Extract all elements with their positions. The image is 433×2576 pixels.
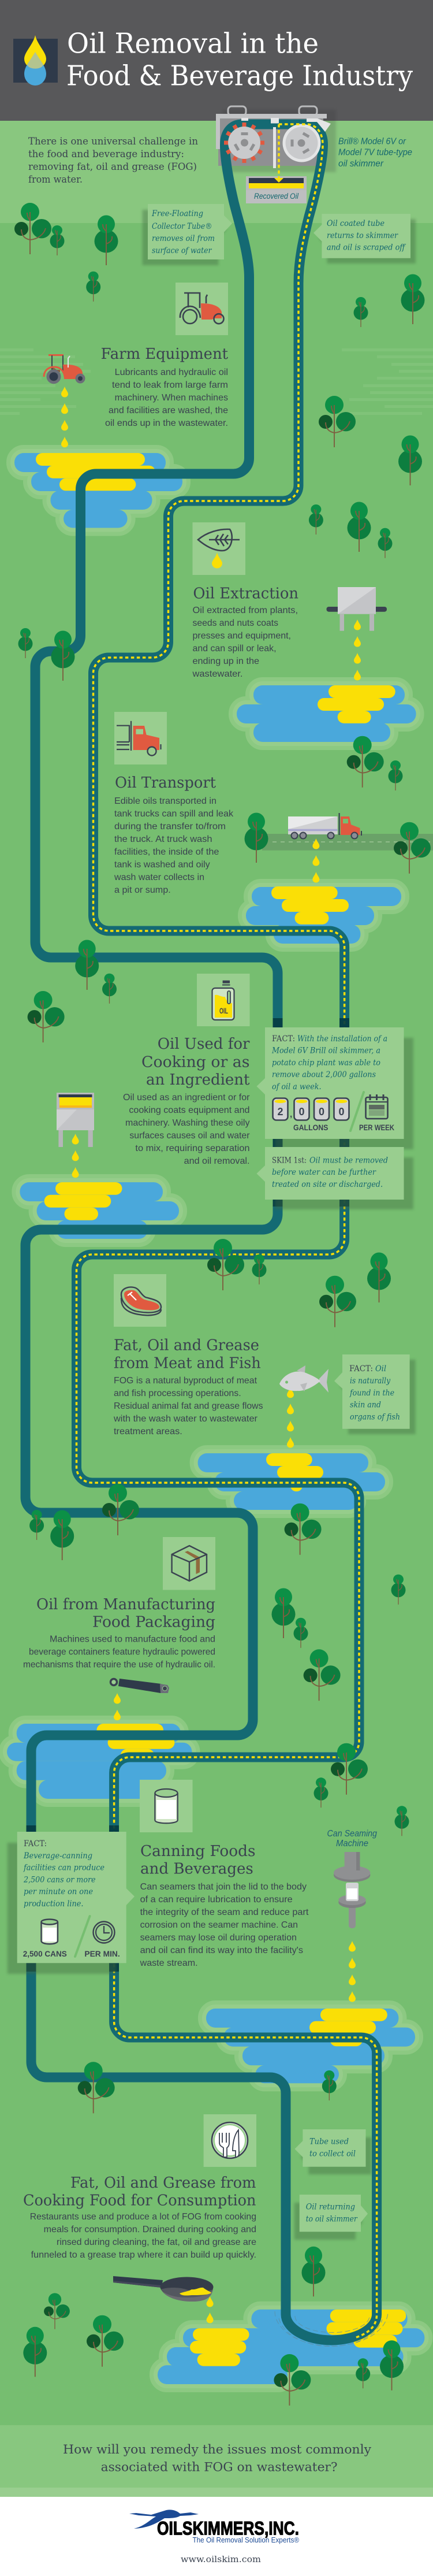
icon: plate box	[204, 2114, 256, 2167]
text: cooking food: meals for consumption. Drained during cooking and	[44, 2225, 256, 2234]
heading: canning: and Beverages	[140, 1860, 253, 1878]
tree	[271, 1588, 296, 1638]
tree	[388, 760, 403, 790]
callout: fact 2,000 gallons: PER WEEK	[359, 1123, 394, 1132]
callout: skim first	[256, 1147, 413, 1209]
text: oil extraction: Oil extracted from plants,	[193, 606, 298, 615]
ponds with oil slicks	[7, 453, 424, 2384]
pond: transport	[246, 886, 401, 944]
text: canning	[140, 1882, 309, 1968]
heading: oil transport: Oil Transport	[115, 774, 216, 792]
tree	[252, 1254, 267, 1285]
text: oil transport: tank is washed and oily	[114, 860, 210, 870]
closing question: associated with FOG on wastewater?	[101, 2460, 338, 2474]
recovered oil tank	[246, 176, 307, 203]
drops: extraction	[354, 619, 361, 681]
icon: can	[42, 1920, 58, 1944]
tree	[23, 2327, 47, 2377]
text: cooking food: Restaurants use and produce a lot of FOG from cooking	[30, 2212, 256, 2222]
heading: oil extraction: Oil Extraction	[193, 585, 298, 603]
tree	[319, 1276, 356, 1327]
text: manufacturing: beverage containers feature hydraulic powered	[29, 1647, 215, 1657]
text: oil transport: a pit or sump.	[114, 885, 171, 895]
callout: fact 2,000 gallons: of oil a week.	[272, 1082, 321, 1092]
tree	[301, 2247, 326, 2296]
text: farm equipment: and facilities are washed, the	[109, 406, 228, 415]
text: oil transport: facilities, the inside of the	[114, 847, 219, 857]
heading: cooking food: Cooking Food for Consumption	[23, 2192, 256, 2210]
illustration: hydraulic cylinder	[111, 1679, 169, 1693]
callout: free-floating tube	[142, 204, 232, 265]
text: cooking food	[30, 2212, 256, 2260]
heading: manufacturing	[36, 1595, 215, 1631]
callout: tube used to collect oil: to collect oil	[309, 2150, 356, 2159]
tree	[102, 1484, 139, 1535]
illustration: tractor	[44, 354, 85, 384]
heading: oil used for cooking: an Ingredient	[146, 1071, 250, 1089]
text: meat and fish: treatment areas.	[114, 1427, 182, 1437]
text: canning: corrosion on the seamer machine. Can	[140, 1920, 298, 1930]
icon: cans showing 2,000: 0	[299, 1106, 305, 1118]
icon: cans showing 2,000: 2	[277, 1106, 283, 1118]
icon: cans showing 2,000: ,	[290, 1109, 292, 1119]
arrow: oil to recovered tank	[274, 124, 283, 183]
heading: cooking food: Fat, Oil and Grease from	[70, 2174, 256, 2192]
drops: frying pan	[207, 2296, 214, 2323]
text: oil transport: Edible oils transported in	[114, 796, 216, 806]
road	[262, 834, 433, 851]
tree	[304, 1649, 341, 1701]
pond: canning	[206, 2009, 415, 2083]
logo: Oil Skimmers Inc: The Oil Removal Solution Experts®	[193, 2536, 299, 2544]
text: oil used for cooking: Oil used as an ingredient or for	[123, 1093, 250, 1103]
tree	[347, 736, 384, 788]
tree	[44, 2293, 70, 2329]
callout: beverage canning fact: facilities can produce	[23, 1864, 104, 1873]
pond: packaging	[7, 1724, 192, 1799]
pond: extraction	[237, 685, 416, 742]
text: oil extraction: wastewater.	[192, 669, 242, 679]
intro text: the food and beverage industry:	[28, 149, 184, 160]
recovered oil tank: Recovered Oil	[254, 192, 299, 201]
callout: fish fact: found in the	[349, 1389, 394, 1398]
illustration: frying pan	[113, 2276, 214, 2302]
text: canning: Can seamers that join the lid to the body	[140, 1882, 307, 1892]
drops: transport	[312, 838, 319, 883]
logo: Oil Skimmers Inc	[129, 2510, 299, 2544]
shaded tube under callouts	[27, 1018, 349, 1972]
callout: fact 2,000 gallons: potato chip plant was able to	[272, 1058, 380, 1067]
callout: fact 2,000 gallons: remove about 2,000 gallons	[272, 1070, 376, 1079]
callout: fact 2,000 gallons: Model 6V Brill oil skimmer, a	[271, 1046, 380, 1056]
callout: oil returning to skimmer: to oil skimmer	[306, 2214, 358, 2224]
icon: oil bottle box: OIL	[219, 1006, 228, 1015]
oil drip dashes on tube	[76, 124, 377, 2337]
tree	[356, 2358, 370, 2388]
tree	[394, 822, 431, 874]
label: can seaming machine: Machine	[336, 1839, 368, 1849]
title: Food & Beverage Industry	[66, 60, 413, 92]
icon: bird	[129, 2510, 199, 2529]
text: manufacturing: mechanisms that require the use of hydraulic oil.	[23, 1660, 215, 1670]
text: cooking food: funneled to a grease trap where it can build up quickly.	[31, 2250, 256, 2260]
illustration: fish	[279, 1365, 329, 1393]
title: Oil Removal in the	[67, 28, 319, 60]
pond: restaurant	[158, 2310, 424, 2384]
callout: beverage canning fact: per minute on one	[24, 1887, 93, 1896]
callout: fish fact	[334, 1354, 416, 1434]
text: oil extraction	[192, 606, 298, 679]
callout: fish fact: organs of fish	[350, 1412, 400, 1421]
text: oil transport: the truck. At truck wash	[114, 834, 212, 844]
icon: cans showing 2,000: 0	[319, 1106, 324, 1118]
callout: beverage canning fact: 2,500 CANS	[23, 1949, 67, 1958]
drops: farm	[61, 387, 68, 447]
tree	[285, 1504, 322, 1555]
tree	[293, 1618, 308, 1648]
tree	[18, 628, 32, 658]
text: oil extraction: and can spill or leak,	[193, 644, 276, 654]
callout: fish fact: is naturally	[350, 1376, 390, 1386]
heading: cooking food	[23, 2174, 256, 2210]
text: manufacturing: Machines used to manufacture food and	[50, 1635, 215, 1645]
icon: cans showing 2,000: 0	[338, 1106, 344, 1118]
callout: beverage canning fact: 2,500 cans or more	[23, 1876, 96, 1885]
tree	[380, 2340, 404, 2391]
text: oil used for cooking	[123, 1093, 250, 1166]
icon: clock	[94, 1922, 114, 1943]
callout: free-floating tube: Collector Tube®	[152, 222, 212, 231]
icon: calendar	[366, 1094, 388, 1119]
tree	[51, 631, 75, 681]
ripples around tube	[275, 2311, 388, 2347]
callout: free-floating tube: surface of water	[152, 246, 212, 255]
collector tube: free-floating side	[25, 124, 286, 2314]
tree	[353, 297, 368, 327]
text: farm equipment: Lubricants and hydraulic oil	[115, 368, 228, 377]
illustration: tank truck	[288, 813, 362, 839]
icon: cans showing 2,000	[273, 1098, 349, 1120]
tree	[391, 1575, 405, 1605]
intro text: There is one universal challenge in	[28, 136, 198, 147]
illustration: can seamer	[334, 1852, 370, 1928]
intro text: from water.	[28, 174, 83, 185]
text: farm equipment: tend to leak from large farm	[112, 380, 228, 390]
label: can seaming machine	[327, 1829, 377, 1849]
closing question	[63, 2443, 371, 2474]
text: meat and fish	[113, 1376, 263, 1437]
skimmer wheels	[224, 118, 331, 168]
text: meat and fish: and fish processing operations.	[114, 1389, 241, 1398]
tree	[319, 396, 356, 447]
label: Brill skimmer: oil skimmer	[338, 159, 384, 169]
collector tube: oil coated side	[76, 124, 377, 2340]
tree	[50, 225, 65, 255]
tree	[78, 2062, 115, 2113]
tree	[274, 2354, 311, 2406]
tree	[401, 274, 425, 324]
text: canning: the integrity of the seam and reduce part	[140, 1907, 309, 1917]
text: meat and fish: Residual animal fat and grease flows	[114, 1401, 263, 1411]
text: oil used for cooking: machinery. Washing these oily	[125, 1118, 249, 1128]
callout: skim first: Oil must be removed	[309, 1156, 388, 1165]
drops: hydraulic	[114, 1693, 121, 1720]
heading: oil used for cooking	[141, 1035, 250, 1089]
callout: beverage canning fact: FACT:	[24, 1839, 47, 1849]
tree	[309, 504, 323, 534]
tree	[398, 436, 422, 485]
icon: can box	[140, 1780, 193, 1832]
closing question: How will you remedy the issues most commonly	[63, 2443, 371, 2456]
text: oil transport: during the transfer to/from	[114, 822, 226, 832]
icon: truck box	[114, 712, 167, 764]
text: oil extraction: ending up in the	[193, 656, 259, 666]
text: farm equipment: machinery. When machines	[115, 393, 228, 403]
icon: oil bottle box	[197, 974, 249, 1026]
text: oil transport	[114, 796, 234, 895]
tree	[75, 940, 99, 990]
tree	[207, 1239, 244, 1290]
text: cooking food: rinsed during cleaning, the fat, oil and grease are	[57, 2237, 256, 2247]
heading: meat and fish	[114, 1337, 261, 1372]
logo: Oil Skimmers Inc: OILSKIMMERS,INC.	[157, 2518, 299, 2539]
tree	[245, 812, 268, 863]
tree	[50, 1510, 74, 1560]
tree	[367, 1253, 391, 1302]
callout: oil coated tube: returns to skimmer	[327, 231, 398, 240]
heading: manufacturing: Food Packaging	[92, 1613, 215, 1631]
text: canning: waste stream.	[140, 1958, 198, 1968]
tree	[29, 1510, 44, 1540]
tree	[348, 502, 371, 552]
text: oil used for cooking: and oil removal.	[184, 1156, 249, 1166]
icon: steak box	[114, 1274, 166, 1327]
heading: manufacturing: Oil from Manufacturing	[36, 1595, 215, 1613]
callout: free-floating tube: removes oil from	[152, 234, 215, 243]
drops: fish	[287, 1387, 294, 1448]
heading: meat and fish: from Meat and Fish	[114, 1354, 261, 1372]
text: oil transport: tank trucks can spill and leak	[114, 809, 234, 819]
text: oil used for cooking: surfaces causes oil and water	[129, 1131, 250, 1141]
tree	[86, 272, 100, 302]
callout: fact 2,000 gallons: FACT:	[272, 1034, 295, 1044]
callout: beverage canning fact: production line.	[24, 1899, 83, 1909]
pond: farm	[14, 453, 182, 528]
callout: oil coated tube: Oil coated tube	[327, 219, 385, 228]
tree	[331, 1743, 368, 1795]
pond: cooking oil	[20, 1182, 179, 1239]
illustration: fryer machine	[57, 1093, 94, 1147]
title	[66, 28, 413, 92]
intro text	[28, 136, 198, 185]
pond: meat and fish	[198, 1453, 385, 1510]
icon: leaf box	[193, 522, 245, 575]
callout: oil coated tube	[313, 214, 416, 263]
tree	[322, 2070, 337, 2100]
text: oil extraction: seeds and nuts coats	[193, 618, 278, 628]
callout: tube used to collect oil: Tube used	[309, 2137, 349, 2147]
callout: beverage canning fact: PER MIN.	[84, 1949, 120, 1958]
tree	[314, 1777, 328, 1807]
callout: fact 2,000 gallons	[256, 1027, 413, 1149]
callout: skim first: before water can be further	[272, 1168, 376, 1177]
text: canning: and oil can find its way into the facility's	[140, 1946, 303, 1955]
text: oil used for cooking: cooking coats equipment and	[129, 1105, 249, 1115]
label: Brill skimmer	[338, 136, 412, 169]
label: Brill skimmer: Model 7V tube-type	[338, 148, 412, 158]
callout: oil returning to skimmer	[294, 2195, 368, 2240]
heading: canning: Canning Foods	[140, 1842, 256, 1860]
drops: can seamer	[349, 1941, 356, 2002]
text: manufacturing	[23, 1635, 215, 1670]
heading: oil used for cooking: Cooking or as	[141, 1053, 249, 1071]
callout: skim first: SKIM 1st:	[272, 1156, 307, 1165]
callout: fish fact: Oil	[375, 1364, 386, 1374]
heading: oil used for cooking: Oil Used for	[158, 1035, 250, 1053]
text: farm equipment	[105, 368, 228, 428]
callout: free-floating tube: Free-Floating	[151, 209, 203, 218]
website: www.oilskim.com	[181, 2555, 261, 2564]
callout: fish fact: FACT:	[349, 1364, 373, 1374]
callout: fact 2,000 gallons: GALLONS	[293, 1123, 328, 1132]
callout: oil returning to skimmer: Oil returning	[306, 2203, 355, 2212]
intro text: removing fat, oil and grease (FOG)	[28, 161, 197, 173]
callout: beverage canning fact: Beverage-canning	[23, 1851, 92, 1861]
heading: canning	[140, 1842, 256, 1878]
text: canning: of a can require lubrication to ensure	[140, 1895, 293, 1905]
text: canning: seamers may lose oil during operation	[140, 1933, 297, 1943]
icon: package box	[163, 1537, 215, 1590]
tree	[378, 528, 393, 558]
label: Brill skimmer: Brill® Model 6V or	[338, 136, 406, 146]
icon: tractor box	[176, 283, 228, 335]
label: can seaming machine: Can Seaming	[327, 1829, 377, 1839]
callout: tube used to collect oil	[294, 2129, 372, 2174]
heading: meat and fish: Fat, Oil and Grease	[114, 1337, 259, 1354]
heading: farm equipment: Farm Equipment	[101, 345, 228, 363]
text: oil extraction: presses and equipment,	[193, 631, 291, 641]
text: meat and fish: FOG is a natural byproduct of meat	[114, 1376, 257, 1386]
logo icon: oil and water drops	[13, 35, 58, 86]
callout: oil coated tube: and oil is scraped off	[327, 243, 406, 253]
drops: cooking oil	[72, 1134, 79, 1178]
tree	[395, 1806, 409, 1836]
callout: beverage canning fact	[8, 1832, 135, 1974]
skimmer housing	[216, 106, 336, 172]
tree	[14, 203, 51, 254]
text: oil used for cooking: to mix, requiring separation	[135, 1144, 249, 1153]
callout: fish fact: skin and	[350, 1401, 381, 1410]
tree	[87, 2315, 124, 2367]
illustration: oil press	[327, 587, 387, 631]
tree	[28, 991, 65, 1042]
callout: fact 2,000 gallons: With the installation of a	[297, 1034, 387, 1044]
callout: skim first: treated on site or discharged.	[272, 1180, 383, 1189]
text: farm equipment: oil ends up in the wastewater.	[105, 418, 228, 428]
tree	[102, 974, 117, 1004]
tree	[95, 215, 118, 265]
text: meat and fish: with the wash water to wastewater	[113, 1414, 258, 1424]
text: oil transport: wash water collects in	[114, 873, 204, 882]
